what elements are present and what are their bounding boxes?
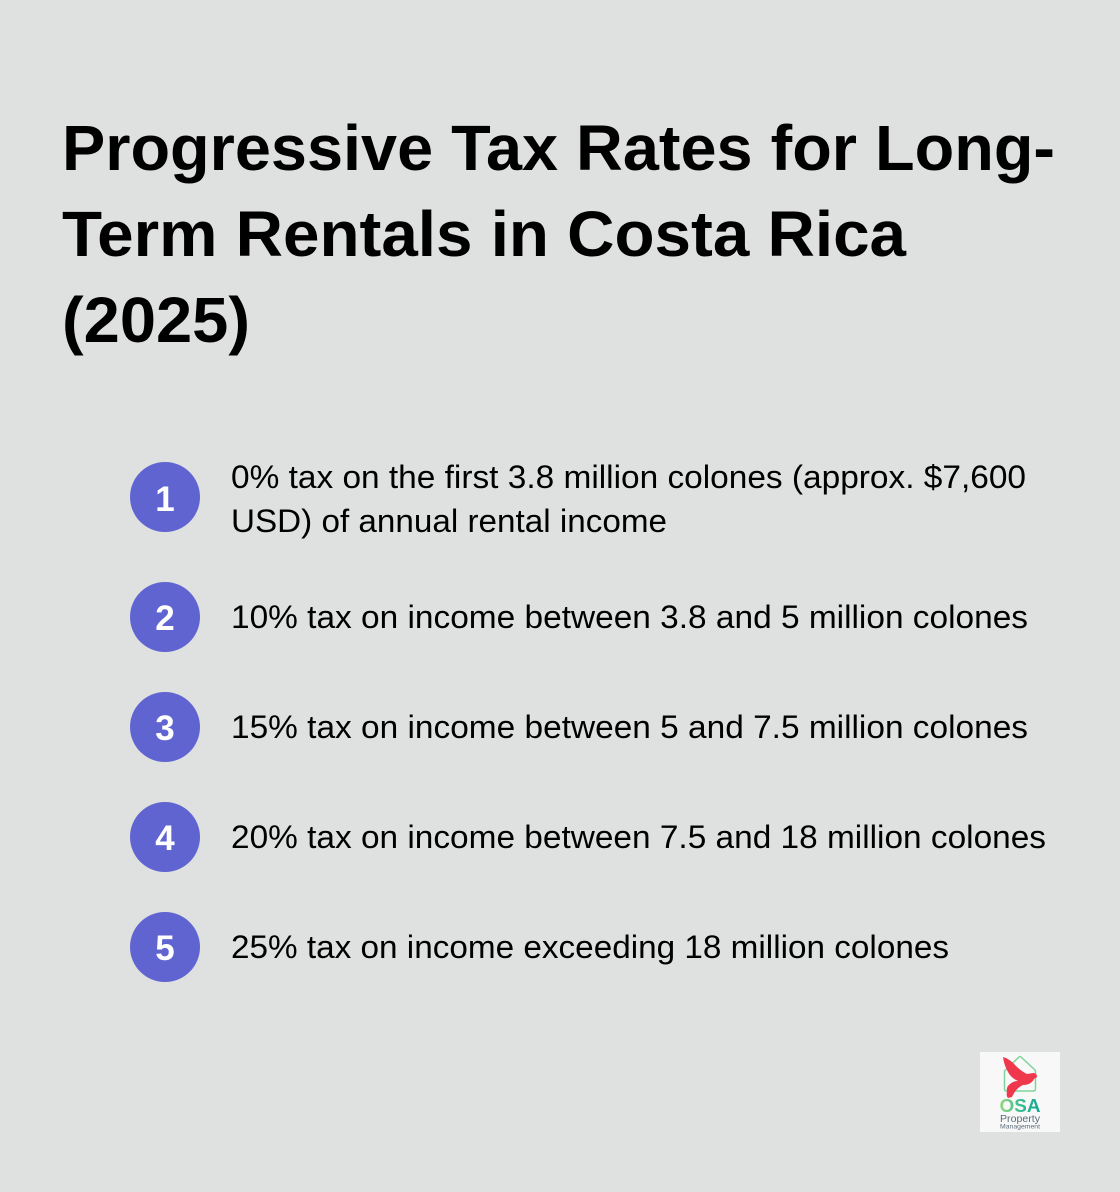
- list item 2: [130, 582, 1028, 652]
- title: (2025): [62, 284, 250, 356]
- number badge 5: [130, 912, 200, 982]
- title: Term Rentals in Costa Rica: [62, 198, 906, 270]
- number badge 3: 3: [155, 709, 175, 748]
- logo subtitle: Property: [1000, 1114, 1040, 1125]
- number badge 3: [130, 692, 200, 762]
- number badge 2: 2: [155, 599, 175, 638]
- list item 5: [130, 912, 949, 982]
- item 1 text: [231, 459, 1026, 539]
- icon: red bird: [1003, 1057, 1037, 1098]
- title: [62, 112, 1055, 356]
- logo small subtitle: Management: [1000, 1124, 1040, 1130]
- number badge 4: 4: [155, 819, 175, 858]
- title: Progressive Tax Rates for Long-: [62, 112, 1055, 184]
- item 2 text: 10% tax on income between 3.8 and 5 million colones: [231, 599, 1028, 635]
- item 1 text: 0% tax on the first 3.8 million colones (approx. $7,600: [231, 459, 1026, 495]
- number badge 1: [130, 462, 200, 532]
- number badge 2: [130, 582, 200, 652]
- number badge 4: [130, 802, 200, 872]
- icon: house outline: [1004, 1056, 1036, 1091]
- item 3 text: 15% tax on income between 5 and 7.5 million colones: [231, 709, 1028, 745]
- item 4 text: 20% tax on income between 7.5 and 18 million colones: [231, 819, 1046, 855]
- list item 1: [130, 459, 1026, 539]
- item 1 text: USD) of annual rental income: [231, 503, 667, 539]
- number badge 1: 1: [155, 480, 175, 519]
- number badge 5: 5: [155, 929, 175, 968]
- list item 3: [130, 692, 1028, 762]
- item 5 text: 25% tax on income exceeding 18 million colones: [231, 929, 949, 965]
- logo: OSA Property Management: [980, 1052, 1060, 1132]
- logo wordmark: OSA: [1000, 1096, 1040, 1116]
- list item 4: [130, 802, 1046, 872]
